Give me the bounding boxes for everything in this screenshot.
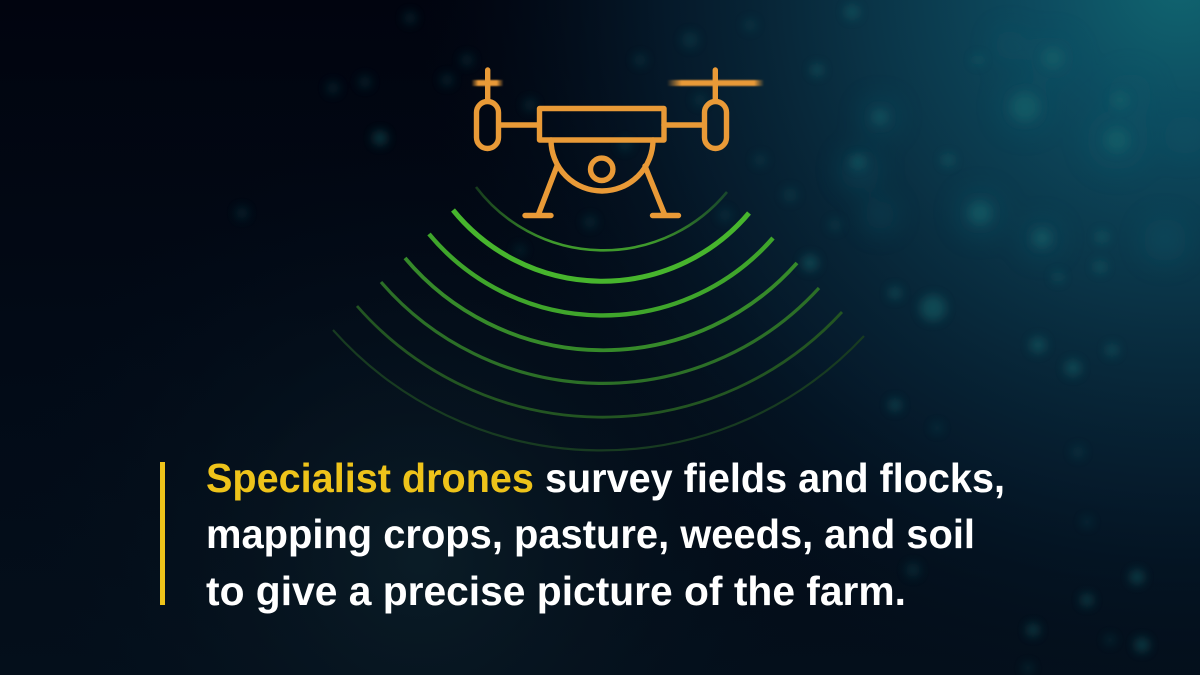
right propeller [667,80,764,86]
caption text [206,455,1005,614]
left propeller [472,80,503,86]
caption line 3: to give a precise picture of the farm. [206,568,906,614]
camera lens [590,158,613,180]
arc 1 (under drone) [476,187,727,250]
arc 4 [405,258,797,350]
arms [499,122,704,128]
arc 6 [357,306,842,417]
right motor pod [704,102,726,148]
arc 5 [381,282,819,383]
left motor pod [476,102,498,148]
camera dome [551,140,653,191]
arc 2 [453,210,749,281]
caption line 2: mapping crops, pasture, weeds, and soil [206,511,975,557]
caption line 1: Specialist drones survey fields and flocks, [206,455,1005,501]
masts [488,70,715,100]
landing legs [525,166,678,216]
arc 7 [333,330,864,450]
signal arcs [333,187,864,450]
accent bar [160,462,165,605]
icon: drone [472,70,764,216]
drone body [540,108,664,140]
arc 3 [429,234,773,315]
